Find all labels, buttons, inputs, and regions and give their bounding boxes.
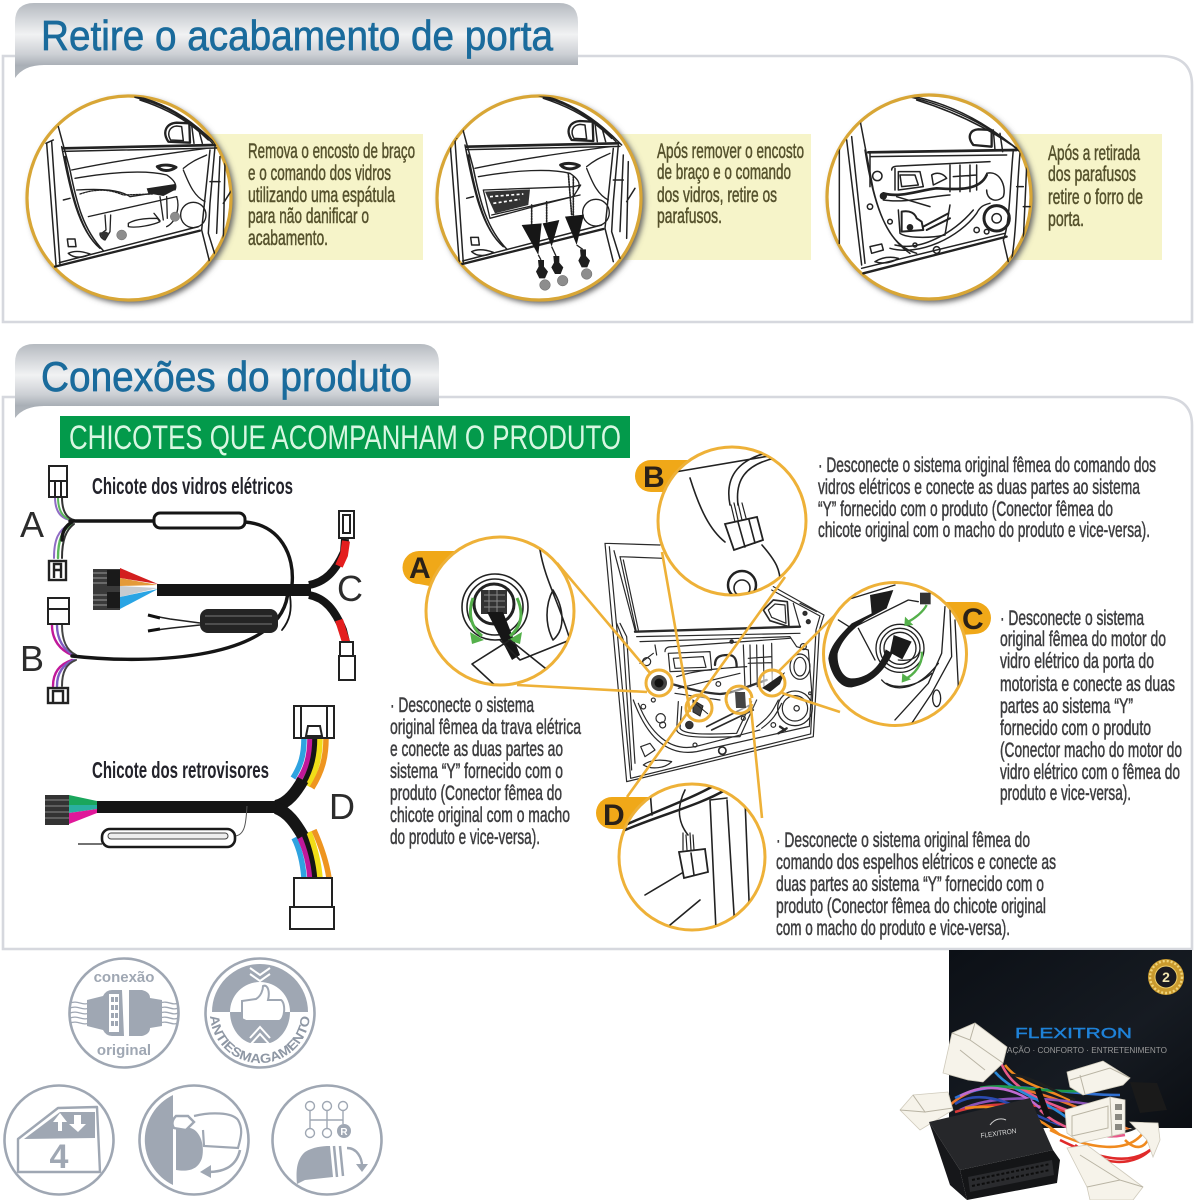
callout B [635,447,806,599]
harness: chicote dos vidros elétricos [20,466,363,703]
panel: conexões do produto [3,344,1192,949]
callout A [402,537,574,690]
text block A: produto (Conector fêmea do [390,782,562,805]
text block A: chicote original com o macho [390,804,570,827]
step 3 caption: dos parafusos [1048,163,1136,186]
control module: FLEXITRON [980,1128,1017,1140]
label C: C [962,603,984,636]
letters A B C: A [20,504,44,545]
step 1 caption: Remova o encosto de braço [248,140,415,163]
icon: conexão original: conexão [94,969,154,986]
harness title retrovisores: Chicote dos retrovisores [92,757,269,783]
harness title vidros: Chicote dos vidros elétricos [92,473,293,499]
warranty seal [1148,959,1184,995]
text block D: com o macho do produto e vice-versa). [776,917,1010,940]
door diagram [517,543,840,818]
step 2 caption: dos vidros, retire os [657,184,777,207]
inline fuse box upper [154,513,245,528]
text block A: do produto e vice-versa). [390,826,540,849]
step 1 door illustration [27,90,235,304]
text block A: · Desconecte o sistema [390,694,534,717]
callout D [596,782,765,930]
connector C lower [339,642,355,680]
hotspot glow and dark parts [646,670,785,721]
label B: B [643,461,665,494]
inline module lower [148,609,278,633]
step 2 caption: Após remover o encosto [657,140,804,163]
heading tab: Conexões do produto [15,344,439,418]
step 2 caption: parafusos. [657,205,722,228]
inline fuse box mirrors [78,806,247,847]
letter D: D [329,786,355,827]
icon: conexão original: original [97,1042,151,1059]
panel: retire o acabamento de porta [3,3,1192,322]
letters A B C: C [337,568,363,609]
step 3 caption: Após a retirada [1048,142,1140,165]
heading tab: Retire o acabamento de porta [15,3,578,78]
heading tab: Retire o acabamento de porta: Retire o acabamento de porta [41,12,554,59]
step 1 caption: utilizando uma espátula [248,184,395,207]
connector B lower [48,688,68,703]
text block D: comando dos espelhos elétricos e conecte as [776,851,1056,874]
text block A: original fêmea da trava elétrica [390,716,581,739]
text block A: e conecte as duas partes ao [390,738,563,761]
text block D: · Desconecte o sistema original fêmea do [776,829,1030,852]
product photo: caixa e módulo Flexitron [900,950,1192,1200]
label A: A [409,552,431,585]
step 2 door illustration [437,88,645,304]
text block D: produto (Conector fêmea do chicote original [776,895,1046,918]
text block C: partes ao sistema “Y” [1000,695,1133,718]
text block A [390,694,581,849]
step 2 caption: de braço e o comando [657,161,791,184]
step 1 caption: acabamento. [248,227,328,250]
product box [949,950,1192,1128]
step 3 door illustration [827,95,1035,303]
warranty seal: 2 [1162,969,1170,985]
step 3 caption [1010,134,1162,260]
text block D [776,829,1056,940]
icon: antiesmagamento: ANTIESMAGAMENTO [210,1016,310,1064]
icon: retrovisor elétrico [140,1086,248,1194]
step 2 caption [620,134,811,260]
step 1 caption: para não danificar o [248,205,369,228]
connector D upper [294,706,334,738]
letters A B C: B [20,638,44,679]
icon: marcha ré rebatimento [272,1086,382,1194]
icon: quatro vidros [4,1086,114,1194]
harness: chicote dos retrovisores [45,706,355,929]
step 3 caption: porta. [1048,208,1084,231]
central connector and wires [93,568,311,610]
product box: AÇÃO · CONFORTO · ENTRETENIMENTO [1007,1046,1167,1055]
icon: conexão original [70,958,178,1068]
text block C [1000,607,1182,805]
label D: D [603,799,625,832]
banner: chicotes que acompanham o produto: CHICOTES QUE ACOMPANHAM O PRODUTO [69,419,621,457]
icon: marcha ré rebatimento: R [340,1127,348,1138]
connector D lower [290,878,334,929]
product box: FLEXITRON [1015,1025,1132,1042]
text block C: produto e vice-versa). [1000,782,1131,805]
wires [950,1060,1155,1162]
callout C [824,582,991,726]
connector B upper [48,598,69,624]
letters A B C [20,504,363,679]
connector A lower [49,561,66,580]
text block A: sistema “Y” fornecido com o [390,760,563,783]
connector C upper [339,511,354,538]
white connectors [900,1023,1167,1200]
step 1 caption [200,134,423,260]
text block B [818,454,1156,542]
control module [929,1098,1060,1200]
icon: antiesmagamento [204,957,316,1069]
connector A upper [49,466,67,497]
icon: quatro vidros: 4 [50,1138,69,1176]
text block D: duas partes ao sistema “Y” fornecido com o [776,873,1044,896]
heading tab: Conexões do produto: Conexões do produto [41,353,412,400]
step 1 caption: e o comando dos vidros [248,162,391,185]
callout leader lines [517,552,840,818]
step 3 caption: retire o forro de [1048,186,1143,209]
